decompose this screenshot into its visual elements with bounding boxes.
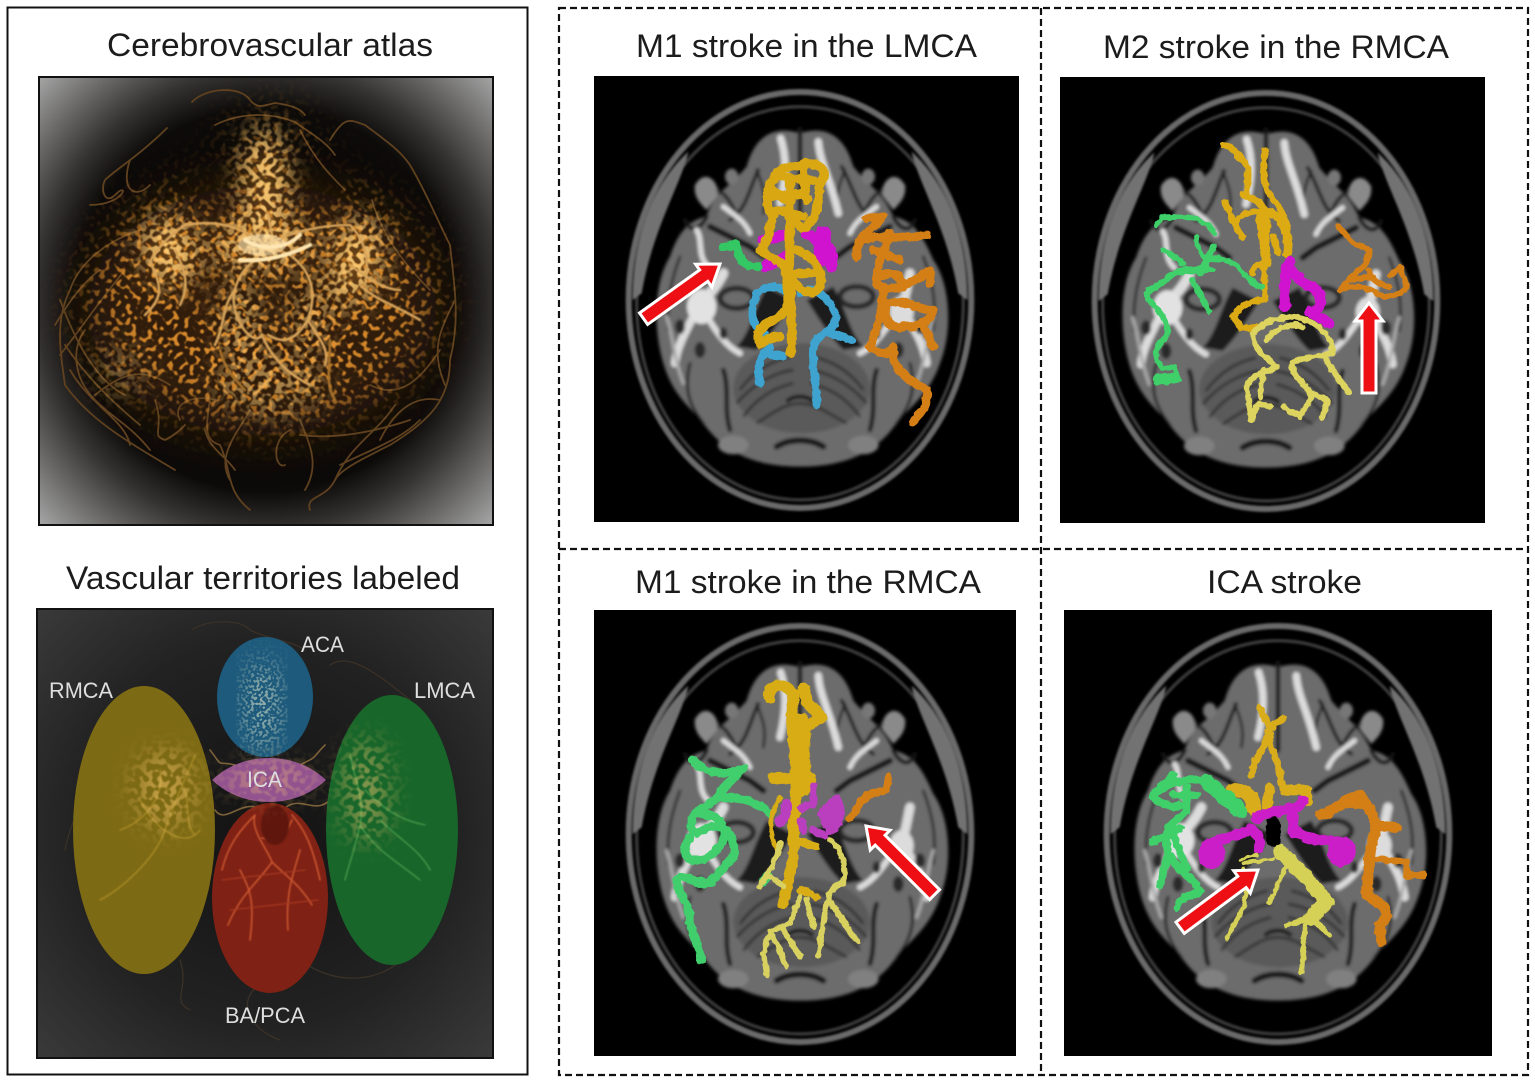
territory: BA/PCA <box>212 803 328 993</box>
dark vessel void <box>261 805 289 845</box>
territory: LMCA <box>326 695 458 965</box>
arrow <box>1172 859 1266 939</box>
vessels <box>1153 708 1423 972</box>
bright central glow <box>238 234 286 256</box>
golden glow <box>150 139 373 298</box>
title: ICA stroke: ICA stroke <box>1207 564 1362 600</box>
panel: ICA stroke scan <box>1064 610 1492 1056</box>
territory: ICA <box>212 758 326 802</box>
title: M1 stroke LMCA: M1 stroke in the LMCA <box>636 28 978 64</box>
title: cerebrovascular atlas: Cerebrovascular atlas <box>107 27 433 63</box>
title: M2 stroke RMCA: M2 stroke in the RMCA <box>1103 29 1450 65</box>
panel: left atlas frame <box>8 8 528 1074</box>
red vessel streaks <box>222 815 320 940</box>
faint vessel strands <box>65 622 410 1040</box>
vessels <box>722 163 933 422</box>
brown haze <box>87 185 437 435</box>
image: vascular territories map <box>37 609 493 1058</box>
bright vessel speckle <box>80 107 404 434</box>
arrow <box>856 816 944 904</box>
title: vascular territories: Vascular territories labeled <box>66 560 460 596</box>
label: BA/PCA: BA/PCA <box>225 1003 305 1028</box>
green vessel streaks <box>345 755 430 880</box>
vessels <box>677 685 888 975</box>
peripheral vessel strands <box>55 90 456 510</box>
panel: dashed stroke grid <box>559 8 1528 1075</box>
label: LMCA: LMCA <box>414 678 475 703</box>
territory: RMCA <box>73 686 215 974</box>
arrow <box>1355 303 1383 393</box>
yellow vessel streaks <box>100 755 200 900</box>
panel: M2 stroke in the RMCA scan <box>1060 77 1485 523</box>
title: M1 stroke RMCA: M1 stroke in the RMCA <box>635 564 982 600</box>
label: ACA: ACA <box>301 632 344 657</box>
label: RMCA: RMCA <box>49 678 113 703</box>
label: ICA: ICA <box>247 767 282 792</box>
panel: M1 stroke in the LMCA scan <box>594 76 1019 522</box>
territory textures <box>122 724 406 854</box>
dim vessel speckle <box>57 90 466 456</box>
panel: M1 stroke in the RMCA scan <box>594 610 1016 1056</box>
arrow <box>635 253 728 330</box>
bright arterial branches <box>145 215 420 400</box>
vessels <box>1147 145 1407 420</box>
territory: ACA <box>217 637 313 757</box>
image: cerebrovascular atlas rendering <box>39 77 493 525</box>
